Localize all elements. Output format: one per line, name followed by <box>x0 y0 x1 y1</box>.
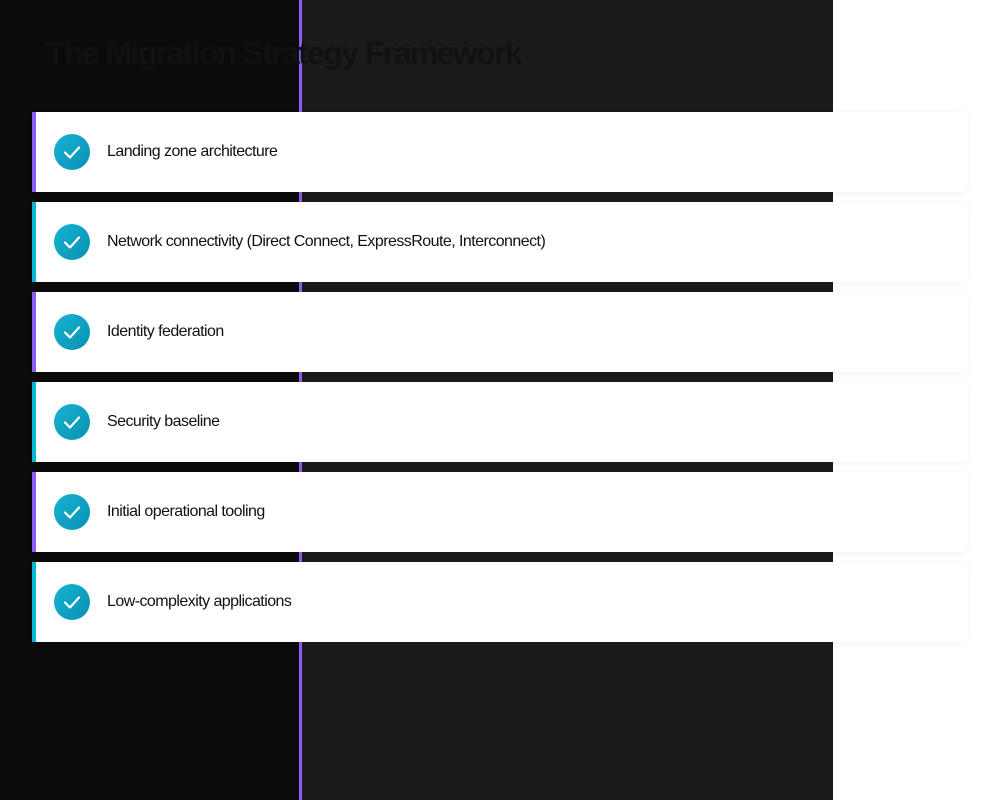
icon: check <box>54 404 90 440</box>
icon: check <box>54 224 90 260</box>
text: Security baseline <box>107 413 220 430</box>
text: Low-complexity applications <box>107 593 291 610</box>
icon: check <box>54 134 90 170</box>
icon: check <box>54 494 90 530</box>
card: security <box>32 382 968 462</box>
card: network <box>32 202 968 282</box>
text: Network connectivity (Direct Connect, ExpressRoute, Interconnect) <box>107 233 545 250</box>
icon: check <box>54 314 90 350</box>
text: Initial operational tooling <box>107 503 265 520</box>
card: low-complexity <box>32 562 968 642</box>
card: tooling <box>32 472 968 552</box>
title: The Migration Strategy Framework <box>46 35 521 71</box>
icon: check <box>54 584 90 620</box>
text: Identity federation <box>107 323 224 340</box>
text: Landing zone architecture <box>107 143 277 160</box>
card: identity <box>32 292 968 372</box>
card: landing zone <box>32 112 968 192</box>
